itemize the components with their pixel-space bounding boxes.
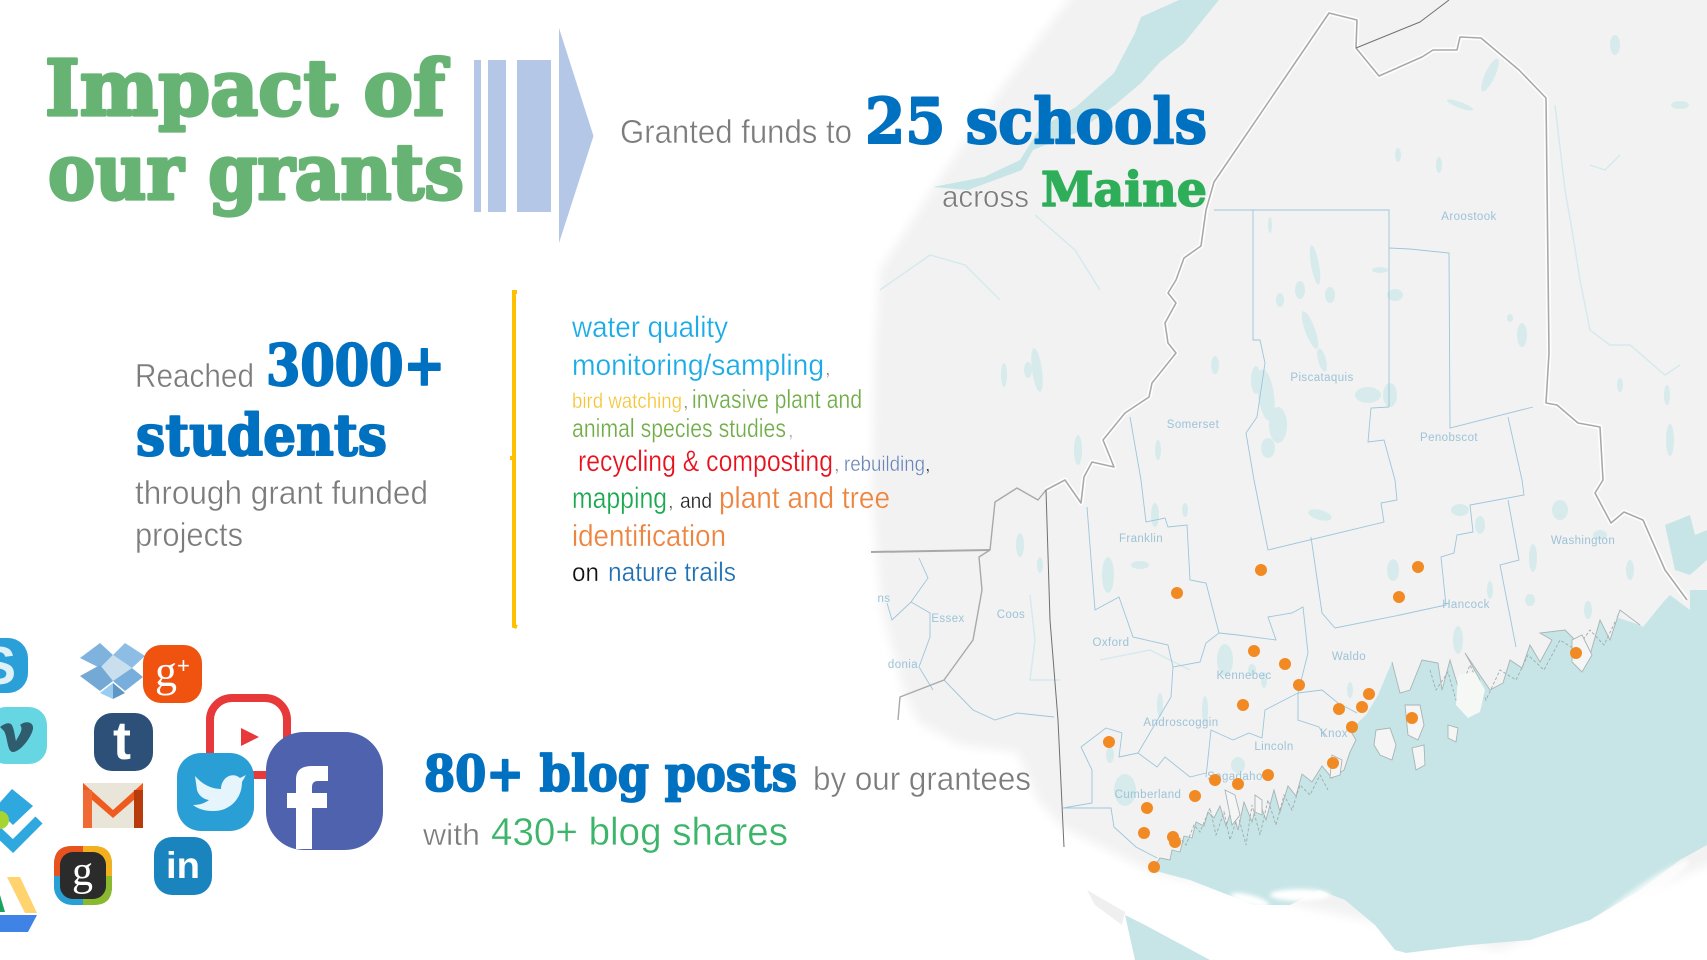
map: county labels: Washington <box>1551 535 1615 547</box>
text: across Maine <box>942 162 1207 218</box>
activities list <box>571 311 931 587</box>
title: our grants <box>48 128 464 218</box>
activities list: invasive plant and <box>692 384 862 414</box>
icon: vimeo <box>0 707 47 764</box>
activities list: water quality <box>571 311 728 344</box>
activities list: , <box>788 420 794 442</box>
icon: linkedin <box>154 837 212 895</box>
text: blog posts: by our grantees <box>813 760 1031 797</box>
activities list: mapping <box>572 482 667 515</box>
map land mass <box>872 0 1707 950</box>
map: white foam edges <box>1229 854 1694 936</box>
text: blog posts <box>424 744 1031 803</box>
activities list: nature trails <box>608 557 736 587</box>
map: state and national borders <box>871 0 1687 847</box>
icon: google plus: + <box>177 653 190 678</box>
text: granted funds to 25 schools: 25 schools <box>865 84 1207 158</box>
map: county labels: Waldo <box>1332 651 1366 663</box>
map: county labels: ns <box>878 593 890 605</box>
icon: facebook <box>266 732 383 850</box>
text: granted funds to 25 schools: Granted funds to <box>620 113 852 150</box>
map: coastline and islands <box>1152 610 1640 870</box>
text: blog shares: 430+ blog shares <box>491 811 788 854</box>
icon: youtube <box>210 698 287 775</box>
activities list: animal species studies <box>572 413 786 443</box>
map: county labels: Essex <box>931 613 965 625</box>
map: county labels: Aroostook <box>1441 211 1497 223</box>
map: county labels: Franklin <box>1119 533 1163 545</box>
activities list: on <box>572 557 599 587</box>
activities list: plant and tree <box>719 480 890 515</box>
activities list: monitoring/sampling <box>572 349 824 382</box>
activities list: rebuilding <box>844 453 925 476</box>
text: reached 3000+ students: students <box>136 402 387 469</box>
map: county labels: donia <box>888 659 918 671</box>
map: county labels: Somerset <box>1167 419 1220 431</box>
icon: skype <box>0 636 28 696</box>
map: Passamaquoddy bay <box>1665 515 1707 575</box>
activities list: , <box>925 454 931 476</box>
icon: twitter <box>177 753 254 831</box>
activities list: , <box>834 454 840 476</box>
icon: google plus: g <box>155 647 177 696</box>
map: county labels: Piscataquis <box>1290 372 1354 384</box>
map: St. Lawrence river <box>933 0 1219 190</box>
map: county lines <box>887 210 1533 858</box>
map: county labels: Cumberland <box>1115 789 1181 801</box>
map: orange school markers <box>1103 561 1582 873</box>
map: county labels: Knox <box>1320 728 1348 740</box>
icon: tumblr: t <box>113 711 131 771</box>
map: Maine and surrounding region <box>871 0 1707 960</box>
text: reached 3000+ students: 3000+ <box>266 332 445 399</box>
map: county labels: Oxford <box>1093 637 1129 649</box>
activities list: and <box>680 490 712 513</box>
activities list: , <box>683 391 689 413</box>
map: county labels: Kennebec <box>1216 670 1272 682</box>
map: county labels: Lincoln <box>1254 741 1294 753</box>
text: reached 3000+ students: Reached <box>135 357 254 394</box>
yellow bracket <box>510 292 517 627</box>
arrow <box>474 28 594 243</box>
title <box>45 44 464 218</box>
activities list: identification <box>572 518 726 553</box>
icon: linkedin: in <box>166 845 200 886</box>
icon: google g <box>54 846 112 905</box>
map: southern sea sliver <box>1125 915 1210 960</box>
map: sea <box>1152 590 1707 953</box>
activities list: recycling & composting <box>578 445 833 478</box>
map: county labels: Androscoggin <box>1143 717 1219 729</box>
title: Impact of <box>45 44 450 134</box>
text: blog shares: with <box>422 817 480 852</box>
map: county labels: Sagadahoc <box>1207 771 1269 783</box>
icon: gmail <box>83 783 143 828</box>
icon: google g: g <box>72 849 93 895</box>
activities list: , <box>825 358 831 380</box>
text: blog posts: 80+ blog posts <box>424 744 797 803</box>
map: county labels: Hancock <box>1442 599 1490 611</box>
activities list: bird watching <box>572 390 682 413</box>
text: across Maine: across <box>942 179 1029 214</box>
map: county labels: Coos <box>997 609 1025 621</box>
icon: foursquare check <box>0 789 39 846</box>
text: reached 3000+ students: through grant funded <box>135 474 428 511</box>
activities list: , <box>668 491 674 513</box>
icon: tumblr <box>94 711 153 771</box>
text: across Maine: Maine <box>1041 162 1207 218</box>
map lakes <box>1001 35 1689 806</box>
text: granted funds to 25 schools <box>620 84 1207 158</box>
text: reached 3000+ students <box>135 332 445 553</box>
icon: google plus <box>143 645 202 703</box>
text: reached 3000+ students: projects <box>135 516 243 553</box>
icon: google drive <box>0 877 37 932</box>
social icons cluster <box>0 636 383 932</box>
icon: dropbox <box>80 643 145 699</box>
map: county labels: Penobscot <box>1420 432 1478 444</box>
map: county labels <box>878 211 1615 801</box>
map rivers <box>880 105 1680 680</box>
